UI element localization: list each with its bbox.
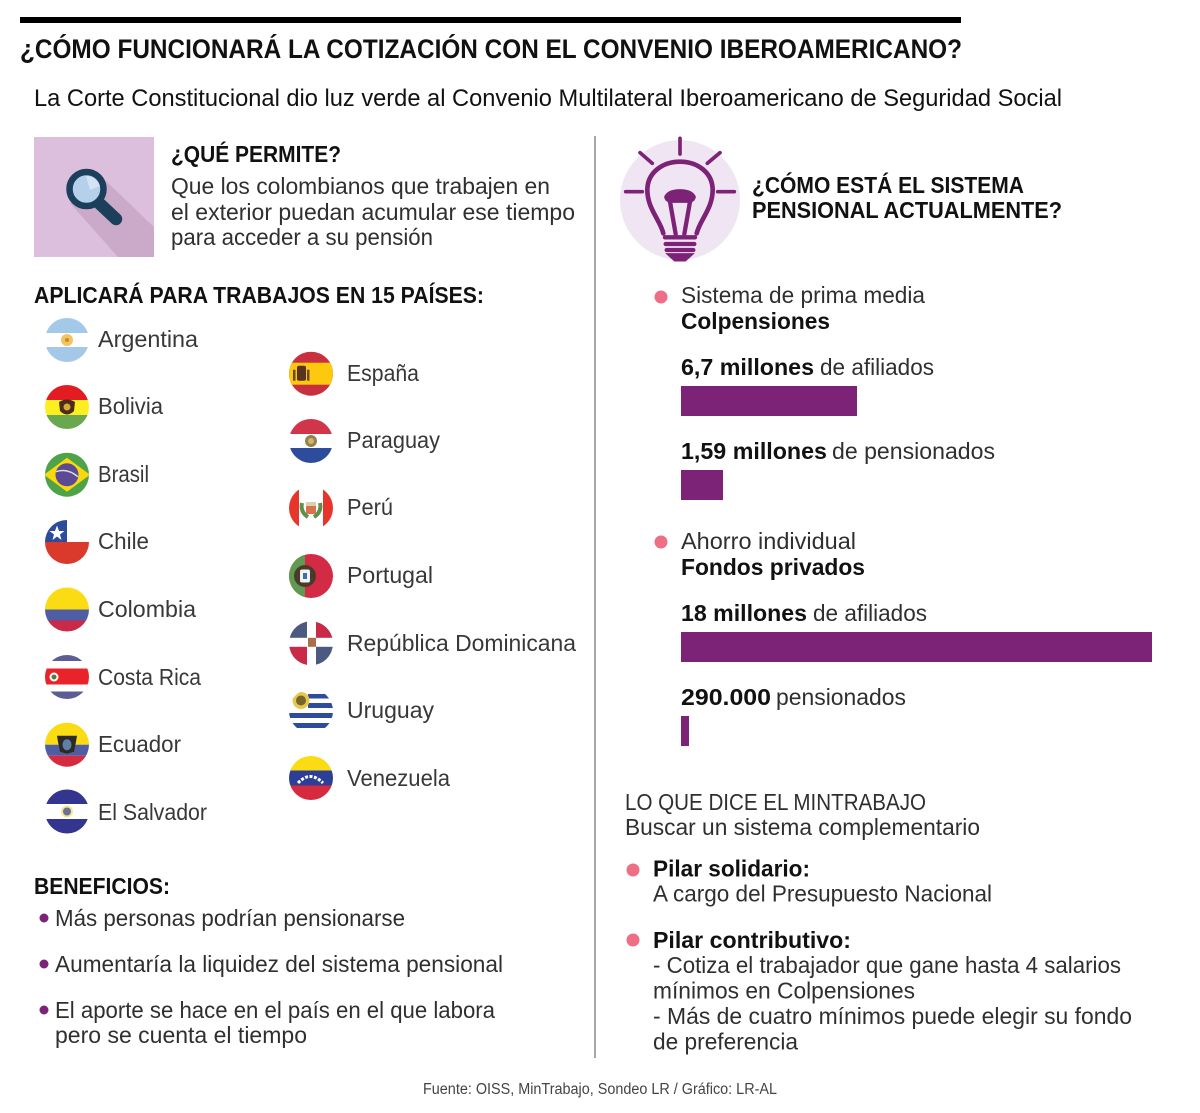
label: España: España [347,360,419,386]
panel: beneficios: Aumentaría la liquidez del sistema pensional [55,951,503,977]
label: Brasil: Brasil [98,461,149,487]
label: Colombia: Colombia [98,596,196,622]
panel: Colpensiones: de afiliados [820,354,934,380]
panel: Fondos privados [654,528,1152,746]
panel: mintrabajo: - Más de cuatro mínimos puede elegir su fondo [653,1003,1132,1029]
icon: light bulb [620,138,740,261]
column divider [594,136,596,1058]
panel: Colpensiones: Colpensiones [681,308,830,334]
label: Uruguay: Uruguay [347,697,434,723]
panel: mintrabajo: - Cotiza el trabajador que gane hasta 4 salarios [653,952,1121,978]
label: Paraguay: Paraguay [347,427,440,453]
panel: Fondos privados: Ahorro individual [681,528,856,554]
flag: Chile [44,519,90,565]
flag: Portugal [288,553,334,599]
panel: Fondos privados: 290.000 [681,684,771,710]
heading: paises: APLICARÁ PARA TRABAJOS EN 15 PAÍSES: [34,281,484,308]
panel: mintrabajo: mínimos en Colpensiones [653,978,915,1004]
panel: mintrabajo [625,789,1132,1054]
heading: sistema pensional: PENSIONAL ACTUALMENTE? [752,197,1062,223]
label: Ecuador: Ecuador [98,731,181,757]
flag: Argentina [46,318,88,362]
panel: Colpensiones: 6,7 millones [681,354,814,380]
panel: que permite [171,140,575,250]
header [20,17,962,64]
bar: 18 millones [681,632,1152,662]
label: Chile: Chile [98,528,149,554]
title: ¿CÓMO FUNCIONARÁ LA COTIZACIÓN CON EL CONVENIO IBEROAMERICANO? [20,33,962,64]
panel: Colpensiones [654,282,995,500]
panel: mintrabajo: Pilar contributivo: [653,927,851,953]
label: Portugal: Portugal [347,562,433,588]
label: Argentina: Argentina [98,326,198,352]
panel: que permite: ¿QUÉ PERMITE? [171,140,341,167]
flag: Paraguay [290,419,332,463]
flag: Ecuador [44,722,90,768]
heading: sistema pensional: ¿CÓMO ESTÁ EL SISTEMA [752,171,1024,198]
panel: mintrabajo: A cargo del Presupuesto Nacional [653,880,992,906]
flag: Brasil [44,452,90,498]
panel: beneficios: El aporte se hace en el país en el que labora [55,997,495,1023]
label: Bolivia: Bolivia [98,393,163,419]
label: República Dominicana: República Dominicana [347,630,576,656]
label: Costa Rica: Costa Rica [98,664,201,690]
flag: Uruguay [289,692,333,728]
panel: beneficios: BENEFICIOS: [34,873,170,899]
panel: beneficios [34,873,503,1048]
panel: Colpensiones: de pensionados [832,438,995,464]
panel: mintrabajo: LO QUE DICE EL MINTRABAJO [625,789,926,815]
flag: Bolivia [44,384,90,430]
flag: República Dominicana [289,622,333,665]
label: Perú: Perú [347,494,393,520]
panel: mintrabajo: de preferencia [653,1028,798,1054]
panel: beneficios: pero se cuenta el tiempo [55,1022,307,1048]
panel: mintrabajo: Pilar solidario: [653,856,810,882]
panel: Fondos privados: de afiliados [813,600,927,626]
bar: 1,59 millones [681,470,723,500]
flag: El Salvador [46,790,88,834]
panel: Fondos privados: pensionados [776,684,906,710]
panel: que permite: para acceder a su pensión [171,224,433,250]
panel: que permite: el exterior puedan acumular ese tiempo [171,199,575,225]
bar: 6,7 millones [681,386,857,416]
flag: Colombia [44,586,90,632]
panel: beneficios: Más personas podrían pensionarse [55,905,405,931]
panel: que permite: Que los colombianos que trabajen en [171,173,550,199]
bar: 290.000 [681,716,689,746]
label: El Salvador: El Salvador [98,799,207,825]
flag: España [288,351,334,397]
subtitle: La Corte Constitucional dio luz verde al Convenio Multilateral Iberoamericano de Seguridad Social [34,85,1062,112]
heading: sistema pensional [752,171,1062,223]
icon: magnifying glass [34,137,154,257]
panel: Fondos privados: Fondos privados [681,554,865,580]
panel: Colpensiones: 1,59 millones [681,438,827,464]
flag: Costa Rica [44,654,90,700]
flag: Perú [289,490,333,526]
flag: Venezuela [288,755,334,802]
panel: Colpensiones: Sistema de prima media [681,282,925,308]
label: Venezuela: Venezuela [347,765,450,791]
panel: Fondos privados: 18 millones [681,600,807,626]
panel: mintrabajo: Buscar un sistema complementario [625,814,980,840]
source credit: Fuente: OISS, MinTrabajo, Sondeo LR / Gráfico: LR-AL [423,1081,777,1098]
